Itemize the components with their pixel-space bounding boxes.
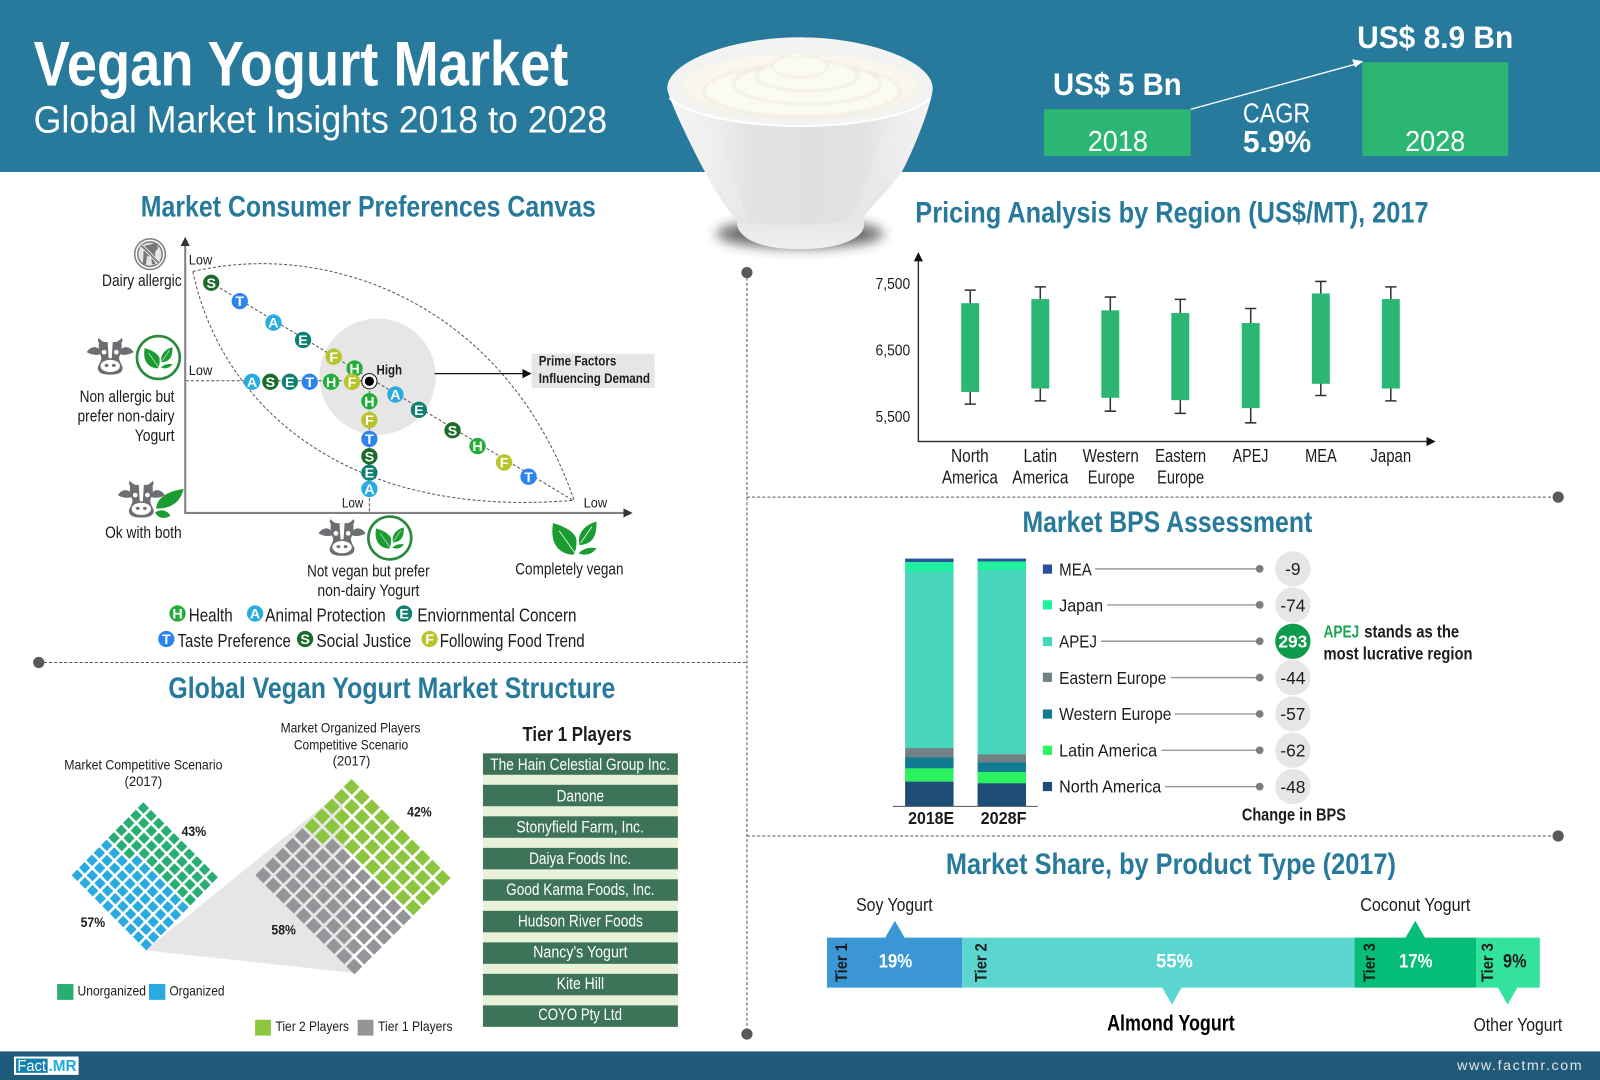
change in BPS values [1275, 551, 1311, 804]
segment: soy: 19% [879, 951, 912, 973]
icon: cow with circled leaf [87, 336, 180, 379]
change in BPS caption: Change in BPS [1242, 805, 1346, 825]
list: tier 1 players: Stonyfield Farm, Inc. [516, 819, 644, 837]
panel: market structure [57, 720, 678, 1036]
x axis labels: APEJ [1233, 445, 1268, 466]
diagonal markers: E [414, 403, 424, 419]
y axis labels: 5,500 [876, 409, 910, 426]
x axis labels: MEA [1305, 445, 1337, 466]
axis low labels: Low [342, 495, 364, 511]
callout: APEJ: stands as the [1364, 621, 1459, 641]
vertical markers: E [365, 466, 374, 482]
legend: organized: Organized [169, 983, 225, 999]
change in BPS values: -57 [1280, 704, 1305, 724]
label: not vegan: Not vegan but prefer [307, 563, 430, 581]
percentages: 43% [182, 824, 206, 840]
caption: organized players: (2017) [333, 754, 370, 769]
caption: organized players: Market Organized Players [281, 720, 421, 735]
y axis labels: 6,500 [876, 343, 910, 360]
x axis labels: Latin [1023, 445, 1057, 466]
caption: organized players: Competitive Scenario [294, 737, 408, 752]
leaf outline [186, 264, 574, 512]
leader lines [1095, 565, 1264, 791]
percentages: 42% [407, 805, 432, 821]
legend: S [300, 632, 310, 648]
CAGR label: CAGR [1243, 97, 1310, 128]
list: tier 1 players: Danone [557, 787, 604, 805]
change in BPS values: -62 [1280, 740, 1305, 760]
x axis labels: Europe [1088, 466, 1135, 487]
legend: H [172, 607, 183, 623]
diagonal markers: E [298, 333, 308, 349]
label: not vegan: non-dairy Yogurt [317, 582, 420, 600]
heading: consumer preferences: Market Consumer Preferences Canvas [141, 190, 596, 223]
bar 2018E [905, 559, 954, 806]
x axis labels: Eastern [1155, 445, 1206, 466]
legend squares [1043, 564, 1052, 791]
website: www.factmr.com [1456, 1058, 1582, 1074]
diagonal markers [203, 275, 537, 486]
segment: other: Tier 3 [1479, 943, 1497, 982]
legend: tiers: Tier 1 Players [378, 1019, 453, 1035]
icon: yogurt bowl [667, 37, 933, 249]
list: tier 1 players [483, 753, 678, 1027]
highlighted high zone [319, 318, 436, 435]
bar 2018 [1044, 109, 1191, 156]
legend: Social Justice [316, 630, 411, 651]
label: completely vegan: Completely vegan [515, 561, 623, 579]
horizontal markers: S [266, 375, 275, 391]
market size graphic [1044, 19, 1513, 159]
segment: other: 9% [1503, 951, 1527, 973]
region labels: Latin America [1059, 740, 1157, 760]
diagonal markers: T [235, 294, 244, 310]
legend: tiers: Tier 2 Players [276, 1019, 349, 1035]
waffle: organized versus unorganized [72, 802, 218, 950]
legend: Animal Protection [265, 605, 386, 626]
logo: .MR [48, 1058, 77, 1075]
horizontal markers: T [305, 375, 314, 391]
horizontal markers: H [326, 375, 336, 391]
horizontal markers: A [247, 375, 257, 391]
list: tier 1 players: The Hain Celestial Group Inc. [490, 756, 670, 774]
region labels: Japan [1059, 595, 1103, 615]
caption: market competitive scenario [64, 758, 223, 789]
arrow: to prime factors [435, 369, 532, 378]
region labels [1059, 560, 1171, 797]
list: tier 1 players: COYO Pty Ltd [538, 1006, 622, 1024]
legend: Following Food Trend [440, 630, 585, 651]
y axis labels [876, 276, 910, 426]
axes [181, 237, 633, 518]
legend: E [399, 607, 409, 623]
segment: almond [962, 938, 1355, 1004]
region labels: Eastern Europe [1059, 668, 1166, 688]
axes [914, 252, 1436, 446]
legend: F [425, 632, 434, 648]
segment: coconut: 17% [1399, 951, 1433, 973]
diagonal markers: S [206, 276, 216, 292]
icon: dairy allergic [135, 239, 165, 269]
segment: coconut [1355, 921, 1476, 988]
segment: almond: 55% [1156, 951, 1193, 973]
diagonal markers: H [349, 362, 360, 378]
list: tier 1 players: Hudson River Foods [518, 912, 643, 930]
list: tier 1 players: Nancy's Yogurt [533, 944, 628, 962]
diagonal markers: A [268, 316, 279, 332]
label: non allergic [78, 388, 175, 445]
label: almond yogurt: Almond Yogurt [1107, 1010, 1235, 1035]
callout: APEJ: most lucrative region [1323, 643, 1472, 663]
change in BPS values: 293 [1278, 632, 1308, 652]
heading: bps assessment: Market BPS Assessment [1022, 506, 1312, 539]
chart: pricing by region [876, 252, 1436, 487]
legend: organized: Unorganized [78, 983, 146, 999]
x axis labels: America [942, 466, 999, 487]
arrow: growth [1191, 59, 1363, 109]
diagonal markers: A [390, 388, 401, 404]
legend: organized [57, 983, 225, 1000]
x axis labels: America [1012, 466, 1069, 487]
chart: consumer preferences canvas [78, 237, 655, 651]
legend: T [162, 632, 171, 648]
x axis labels: North [951, 445, 989, 466]
label: non allergic: prefer non-dairy [78, 408, 175, 426]
bar labels: 2018E [908, 808, 954, 828]
vertical markers: H [364, 394, 375, 410]
bar labels: 2028F [981, 808, 1027, 828]
axis low labels: Low [189, 363, 213, 379]
region labels: North America [1059, 777, 1161, 797]
label: coconut yogurt: Coconut Yogurt [1360, 894, 1470, 915]
callout: prime factors: Prime Factors [539, 353, 617, 368]
region labels: Western Europe [1059, 704, 1171, 724]
legend: Enviornmental Concern [417, 605, 577, 626]
axis low labels: Low [584, 495, 608, 511]
segment: soy [827, 921, 962, 988]
x axis labels [942, 445, 1411, 487]
x axis labels: Europe [1157, 466, 1204, 487]
bar labels [908, 808, 1027, 828]
diagonal markers: S [448, 423, 457, 439]
year 2018: 2018 [1088, 126, 1148, 158]
legend: Taste Preference [178, 630, 291, 651]
caption: market competitive scenario: (2017) [124, 774, 162, 789]
region labels: MEA [1059, 560, 1092, 580]
year 2028: 2028 [1405, 126, 1465, 158]
x axis labels: Japan [1370, 445, 1411, 466]
dashed dividers [33, 267, 1564, 1040]
segment: other [1476, 938, 1540, 1004]
label: non allergic: Yogurt [135, 427, 175, 445]
percentages: 57% [81, 915, 105, 931]
label: ok with both: Ok with both [105, 524, 182, 542]
segment: coconut: Tier 3 [1361, 943, 1379, 982]
callout: prime factors: Influencing Demand [539, 371, 650, 386]
list: tier 1 players: Daiya Foods Inc. [529, 850, 631, 868]
axis low labels: Low [189, 252, 213, 268]
bar 2028F [978, 559, 1026, 806]
percentages: 58% [271, 923, 296, 939]
heading: market structure: Global Vegan Yogurt Market Structure [168, 672, 615, 705]
change in BPS values: -9 [1285, 559, 1301, 579]
horizontal markers: E [285, 375, 295, 391]
vertical markers: F [365, 413, 374, 429]
icon: vegan leaves [552, 522, 596, 555]
chart: market share by product type [827, 894, 1562, 1035]
subtitle: Global Market Insights 2018 to 2028 [34, 100, 607, 142]
region labels: APEJ [1059, 632, 1097, 652]
logo: Fact [17, 1058, 47, 1075]
segment: soy: Tier 1 [833, 943, 851, 982]
caption: organized players [281, 720, 421, 769]
label: dairy allergic: Dairy allergic [102, 272, 182, 290]
header band [0, 0, 1600, 172]
diagonal markers: F [500, 456, 509, 472]
vertical markers: A [364, 482, 375, 498]
heading: market share: Market Share, by Product Type (2017) [946, 848, 1396, 881]
change in BPS values: -74 [1280, 595, 1306, 615]
heading: pricing analysis: Pricing Analysis by Region (US$/MT), 2017 [915, 197, 1429, 230]
diagonal markers: H [472, 439, 483, 455]
label: soy yogurt: Soy Yogurt [856, 894, 933, 915]
percentages [81, 805, 432, 939]
value 2028: US$ 8.9 Bn [1357, 19, 1513, 55]
change in BPS values: -48 [1280, 777, 1305, 797]
whiskers [965, 281, 1396, 423]
vertical markers [361, 393, 378, 498]
label: not vegan [307, 563, 430, 600]
diagonal markers: T [524, 470, 533, 486]
vertical markers: S [365, 449, 374, 465]
segment: almond: Tier 2 [973, 943, 991, 982]
icon: cow and leaf [118, 481, 184, 518]
logo [14, 1057, 79, 1075]
value 2018: US$ 5 Bn [1053, 66, 1182, 102]
high label: High [377, 363, 402, 379]
callout: prime factors [532, 353, 655, 388]
y axis labels: 7,500 [876, 276, 910, 293]
horizontal markers: F [348, 375, 357, 391]
legend: A [250, 607, 260, 623]
list: tier 1 players: Kite Hill [557, 975, 604, 993]
footer band [0, 1051, 1600, 1080]
legend: tiers [255, 1019, 453, 1036]
bar 2028 [1362, 62, 1508, 156]
callout: APEJ [1323, 621, 1472, 663]
callout: APEJ: APEJ [1323, 621, 1359, 641]
waffle: tier players [255, 779, 451, 974]
chart: BPS stacked bars [893, 551, 1472, 828]
list: tier 1 players: Good Karma Foods, Inc. [506, 881, 655, 899]
axis low labels [189, 252, 608, 511]
connector wedge [145, 791, 354, 973]
legend [158, 605, 585, 651]
price range bars [961, 293, 1400, 408]
icon: cow with circled leaf lower [319, 517, 411, 559]
x axis labels: Western [1083, 445, 1139, 466]
diagonal markers: F [329, 350, 338, 366]
label: other yogurt: Other Yogurt [1473, 1014, 1562, 1035]
baseline [893, 805, 1038, 807]
center point [362, 374, 377, 389]
change in BPS values: -44 [1280, 668, 1306, 688]
list heading: tier 1 players: Tier 1 Players [522, 724, 632, 746]
caption: market competitive scenario: Market Competitive Scenario [64, 758, 223, 773]
title: Vegan Yogurt Market [34, 30, 568, 100]
vertical markers: T [365, 432, 374, 448]
horizontal markers [244, 374, 360, 391]
CAGR value: 5.9% [1243, 125, 1311, 159]
legend: Health [189, 605, 233, 626]
label: non allergic: Non allergic but [80, 388, 175, 406]
